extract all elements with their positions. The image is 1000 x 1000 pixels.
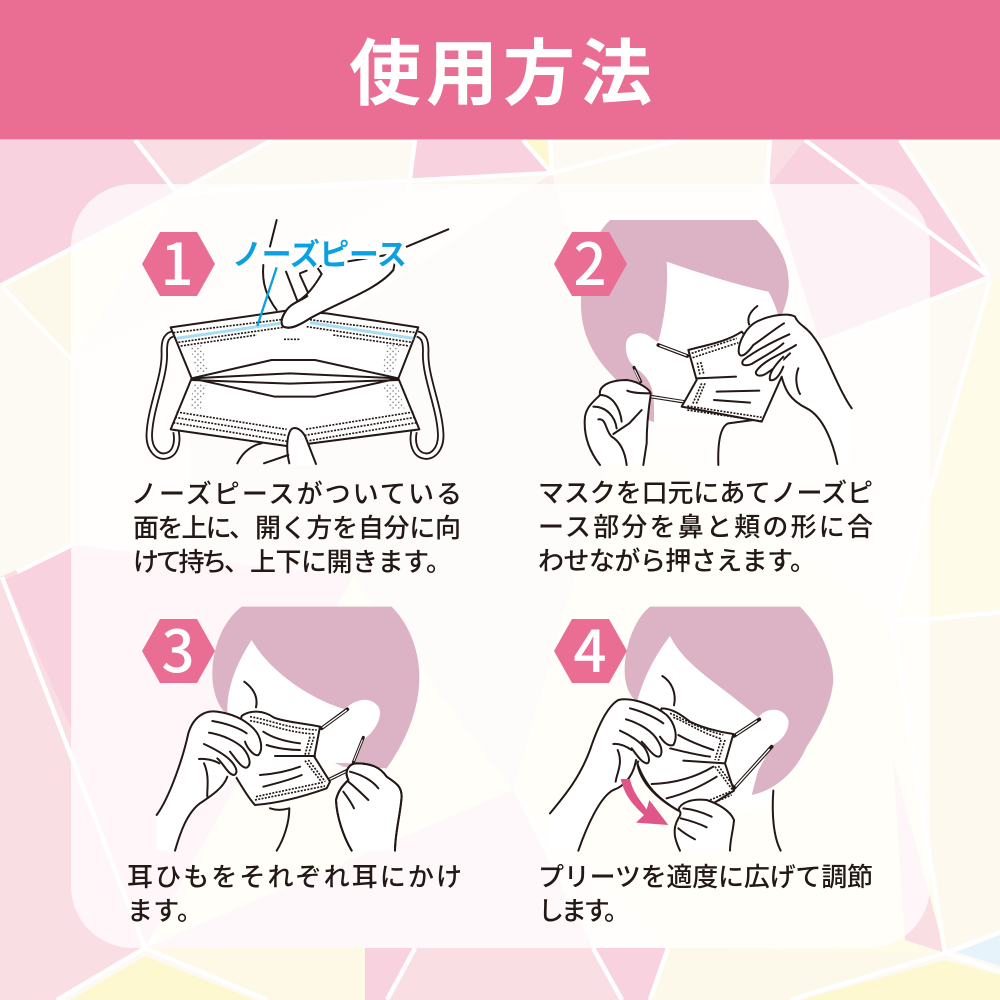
step 2 text: [538, 473, 873, 578]
step 1: [131, 218, 462, 579]
right hand: [675, 800, 734, 851]
label: nose piece: ノーズピース: [232, 230, 407, 274]
badge 2: 2: [573, 218, 607, 302]
finger on nose piece: [282, 253, 397, 328]
badge 1: [142, 218, 215, 302]
badge 4: 4: [573, 605, 607, 689]
neck: [773, 791, 781, 851]
step 1 text: [131, 474, 462, 579]
badge 4: [554, 605, 627, 689]
step 2 text: ース部分を鼻と頬の形に合: [538, 507, 873, 544]
mask: [682, 332, 782, 422]
translucent white rounded panel: [71, 184, 930, 948]
step 3 text: [127, 857, 462, 928]
badge 2: [554, 218, 627, 302]
left hand: [585, 380, 651, 465]
neck: [718, 420, 753, 465]
step 4 text: [538, 857, 873, 928]
title: 使用方法: [349, 15, 652, 120]
illustration: spreading pleats: [550, 607, 833, 851]
step 1 text: 開く方を自分に向: [255, 508, 461, 545]
illustration: mask with nose piece: [149, 220, 448, 465]
step 3 text: ます。: [127, 891, 203, 928]
step 1 text: 面を上に、: [133, 508, 255, 545]
neck: [270, 808, 289, 851]
mask: [230, 712, 330, 805]
nose piece leader line: [257, 267, 277, 326]
step 2: [538, 218, 873, 578]
step 1 text: ノーズピースがついている: [131, 474, 462, 511]
step 3: [127, 605, 462, 928]
step 1 text: けて持ち、: [133, 542, 250, 579]
header band: [0, 0, 1000, 140]
badge 1: 1: [160, 218, 194, 302]
right hand: [737, 315, 852, 464]
badge 3: [142, 605, 215, 689]
badge 3: 3: [161, 605, 195, 689]
mask: [637, 708, 734, 811]
right hand: [336, 763, 402, 851]
step 1 text: 上下に開きます。: [250, 542, 452, 579]
step 3 text: 耳ひもをそれぞれ耳にかけ: [127, 857, 462, 894]
arrow: pink pull direction: [621, 779, 668, 825]
step 4: [538, 605, 873, 928]
lower thumb: [287, 428, 317, 465]
step 4 text: します。: [538, 891, 630, 928]
step 2 text: マスクを口元にあてノーズピ: [538, 473, 873, 510]
illustration: ear loops: [157, 607, 419, 851]
left hand: [550, 699, 676, 851]
step 2 text: わせながら押さえます。: [538, 541, 816, 578]
left hand: [157, 711, 261, 851]
step 4 text: プリーツを適度に広げて調節: [538, 857, 873, 894]
illustration: fitting mask on face: [581, 220, 852, 465]
